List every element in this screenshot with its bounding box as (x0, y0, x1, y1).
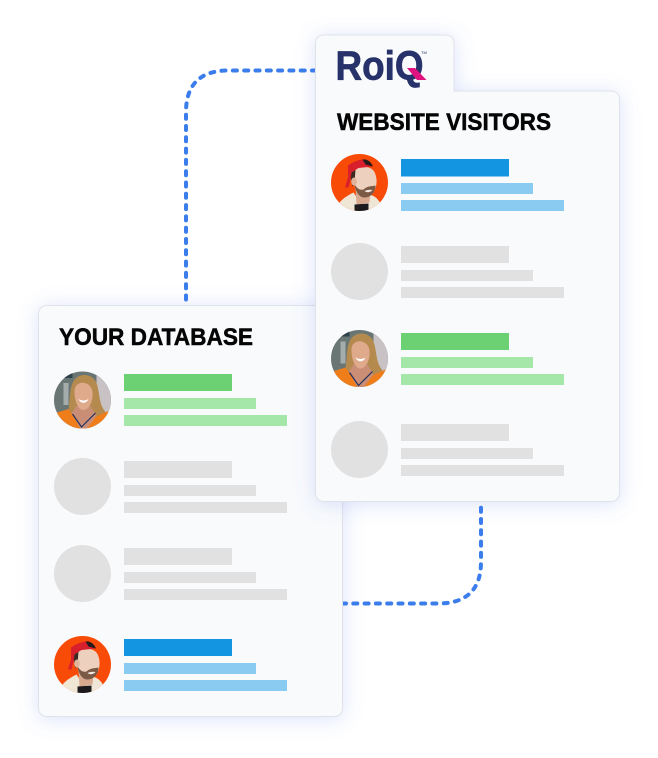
green record bars (124, 374, 287, 426)
gray record bars (124, 461, 287, 513)
database row: anonymous 2 (54, 545, 287, 602)
dashed connector: bottom, from your database to website visitors (342, 501, 481, 604)
visitor row: anonymous 2 (331, 421, 564, 478)
icon: man avatar (330, 154, 388, 212)
gray record bars (124, 548, 287, 600)
logo: RoiQ: TM (421, 50, 427, 55)
icon: anonymous avatar (54, 545, 111, 602)
database row: matched woman, green (54, 371, 287, 429)
visitor row: anonymous 1 (331, 243, 564, 300)
icon: man avatar (54, 636, 112, 694)
database row: anonymous 1 (54, 458, 287, 515)
blue record bars (124, 639, 287, 691)
heading: your database: YOUR DATABASE (59, 324, 253, 351)
gray record bars (401, 424, 564, 476)
icon: anonymous avatar (331, 421, 388, 478)
logo: RoiQ: RoiQ (336, 42, 424, 88)
visitor row: matched man, blue (330, 154, 564, 212)
icon: woman avatar (330, 330, 388, 388)
icon: woman avatar (54, 371, 112, 429)
panel: your database (38, 306, 342, 716)
heading: website visitors: WEBSITE VISITORS (337, 109, 551, 136)
visitor row: matched woman, green (330, 330, 564, 388)
dashed connector: top, from logo tab to your database (186, 70, 316, 303)
gray record bars (401, 246, 564, 298)
panel: website visitors (316, 35, 620, 502)
icon: anonymous avatar (54, 458, 111, 515)
database row: matched man, blue (54, 636, 287, 694)
panel background with logo tab (316, 35, 620, 502)
green record bars (401, 333, 564, 385)
icon: anonymous avatar (331, 243, 388, 300)
blue record bars (401, 159, 564, 211)
panel background (38, 306, 342, 716)
